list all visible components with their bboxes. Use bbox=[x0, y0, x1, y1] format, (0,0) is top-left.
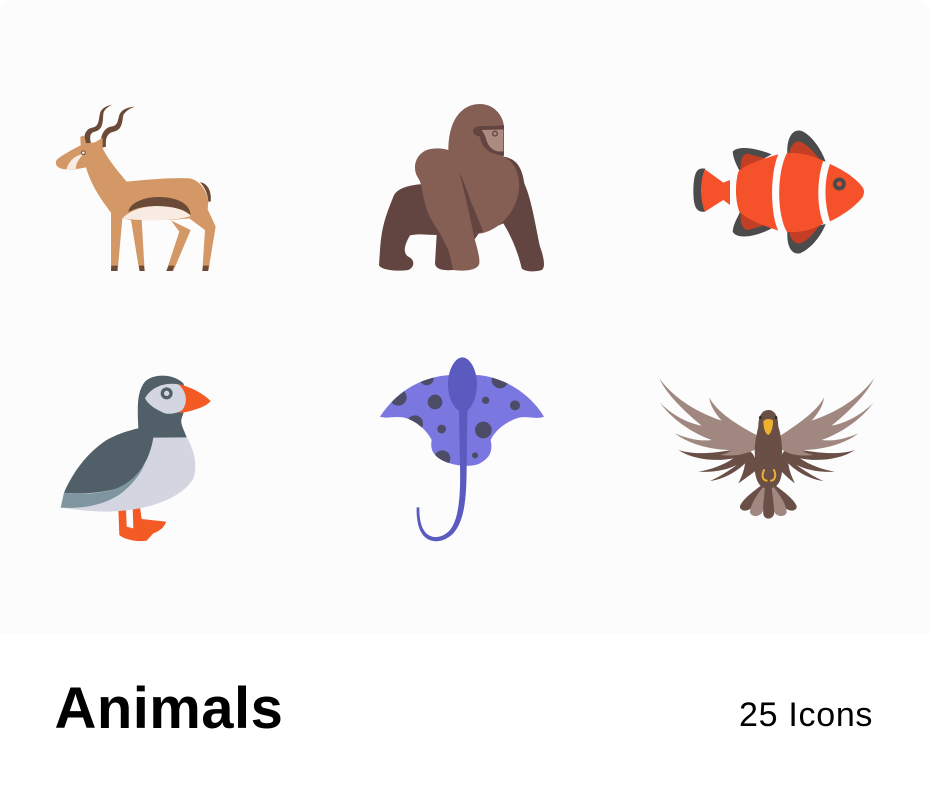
eagle right lower feathers bbox=[780, 450, 855, 483]
puffin wing edge bbox=[61, 463, 145, 508]
puffin head and back bbox=[64, 376, 188, 493]
eagle tail feathers bbox=[740, 485, 797, 519]
eagle eyes bbox=[759, 416, 777, 419]
infographic canvas bbox=[56, 104, 874, 728]
stingray tail bbox=[417, 463, 467, 541]
eagle body bbox=[754, 410, 782, 489]
eagle talons bbox=[763, 470, 775, 481]
gorilla eye bbox=[493, 131, 497, 136]
icon: puffin bbox=[61, 376, 211, 541]
icon: antelope bbox=[56, 105, 216, 271]
puffin beak bbox=[178, 384, 211, 413]
puffin face bbox=[145, 384, 189, 414]
icon: clownfish bbox=[693, 131, 864, 254]
icon: gorilla bbox=[379, 104, 544, 271]
gorilla arm fold bbox=[459, 172, 483, 234]
gorilla face shadow bbox=[473, 125, 504, 156]
antelope eye bbox=[81, 151, 85, 154]
clownfish dark fins bbox=[693, 131, 826, 254]
antelope body bbox=[56, 136, 216, 271]
clownfish front body bbox=[736, 154, 778, 231]
puffin eye bbox=[162, 389, 171, 398]
clownfish middle body bbox=[779, 153, 823, 232]
antelope belly bbox=[123, 206, 191, 220]
eagle right wing bbox=[780, 378, 874, 456]
clownfish head bbox=[825, 164, 864, 221]
icon: stingray bbox=[380, 357, 544, 541]
clownfish eye bbox=[835, 179, 844, 188]
gorilla face bbox=[482, 129, 503, 152]
gorilla dark limbs bbox=[379, 157, 544, 271]
gorilla torso and head bbox=[415, 104, 519, 271]
eagle beak bbox=[763, 419, 773, 435]
puffin feet bbox=[118, 507, 166, 541]
clownfish tail bbox=[701, 169, 730, 212]
stingray wings bbox=[380, 375, 544, 466]
title: Animals bbox=[54, 676, 283, 741]
antelope flank stripe bbox=[128, 197, 191, 215]
antelope tail bbox=[200, 182, 211, 202]
eagle left wing bbox=[659, 378, 758, 456]
puffin belly bbox=[61, 435, 195, 512]
eagle left lower feathers bbox=[678, 450, 757, 483]
antelope muzzle patch bbox=[67, 154, 83, 169]
stingray spots bbox=[392, 378, 520, 463]
icon: eagle bbox=[659, 378, 874, 519]
antelope horns bbox=[84, 105, 135, 148]
stingray head and spine bbox=[448, 357, 477, 465]
antelope hooves bbox=[111, 266, 209, 271]
clownfish red fin centres bbox=[741, 141, 821, 244]
icon count: 25 Icons bbox=[739, 696, 873, 734]
